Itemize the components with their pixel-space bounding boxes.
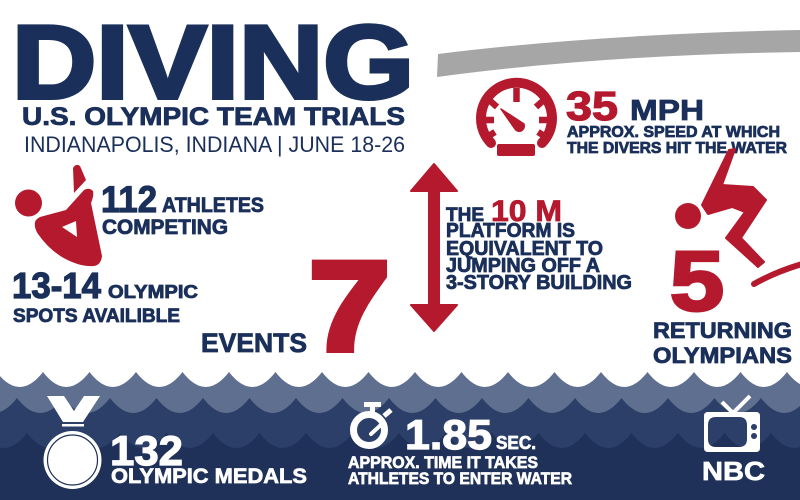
label: returning: RETURNING <box>653 318 792 343</box>
medals stat <box>44 396 307 489</box>
stat: 1.85: 1.85 <box>405 411 492 458</box>
word: THE: THE <box>446 205 484 226</box>
fact line 2: PLATFORM IS <box>446 220 575 242</box>
platform fact <box>446 195 632 294</box>
label: Olympians: OLYMPIANS <box>653 343 792 368</box>
stat: 132: 132 <box>110 427 183 474</box>
speed caption line 2: THE DIVERS HIT THE WATER <box>567 140 787 157</box>
icon: medal <box>44 396 102 489</box>
unit: sec.: SEC. <box>496 433 536 453</box>
icon: piked diver <box>15 165 102 266</box>
arrow: double-headed height arrow <box>411 164 457 331</box>
returning Olympians stat <box>653 149 800 368</box>
fact line 3: EQUIVALENT TO <box>446 238 603 260</box>
title: DIVING: DIVING <box>12 5 414 121</box>
caption line 1: APPROX. TIME IT TAKES <box>348 454 538 472</box>
label: NBC: NBC <box>702 456 765 486</box>
entry time stat <box>348 404 572 488</box>
icon: stopwatch <box>354 404 391 446</box>
unit: MPH: MPH <box>630 95 704 127</box>
events stat <box>201 235 390 377</box>
athletes stat <box>15 165 264 266</box>
label: Olympic: OLYMPIC <box>108 282 198 302</box>
fact line 5: 3-STORY BUILDING <box>446 272 632 294</box>
stat: 7: 7 <box>309 235 390 377</box>
stat: 13-14: 13-14 <box>12 265 101 306</box>
caption line 2: ATHLETES TO ENTER WATER <box>348 470 572 488</box>
location and dates: INDIANAPOLIS, INDIANA | JUNE 18-26 <box>24 132 405 157</box>
subtitle: U.S. Olympic Team Trials: U.S. OLYMPIC TEAM TRIALS <box>22 103 405 131</box>
broadcaster <box>702 396 765 486</box>
label: Olympic medals: OLYMPIC MEDALS <box>111 465 307 488</box>
stat: 10 M: 10 M <box>491 195 562 228</box>
icon: speedometer <box>481 83 552 156</box>
Olympic spots stat <box>12 265 198 327</box>
label: competing: COMPETING <box>102 216 228 239</box>
stat: 5: 5 <box>670 234 724 328</box>
label: spots availible: SPOTS AVAILIBLE <box>13 306 180 327</box>
speed caption line 1: APPROX. SPEED AT WHICH <box>567 124 780 141</box>
stat: 112: 112 <box>101 179 157 220</box>
icon: diver in tuck <box>675 149 800 284</box>
water waves background <box>0 360 800 500</box>
fact line 4: JUMPING OFF A <box>446 255 600 277</box>
speed stat <box>481 83 787 157</box>
label: events: EVENTS <box>201 328 307 358</box>
stat: 35: 35 <box>566 83 618 129</box>
decorative platform: grey diving board <box>437 30 800 77</box>
label: athletes: ATHLETES <box>162 194 264 217</box>
icon: television <box>704 396 760 452</box>
title block <box>12 5 414 157</box>
